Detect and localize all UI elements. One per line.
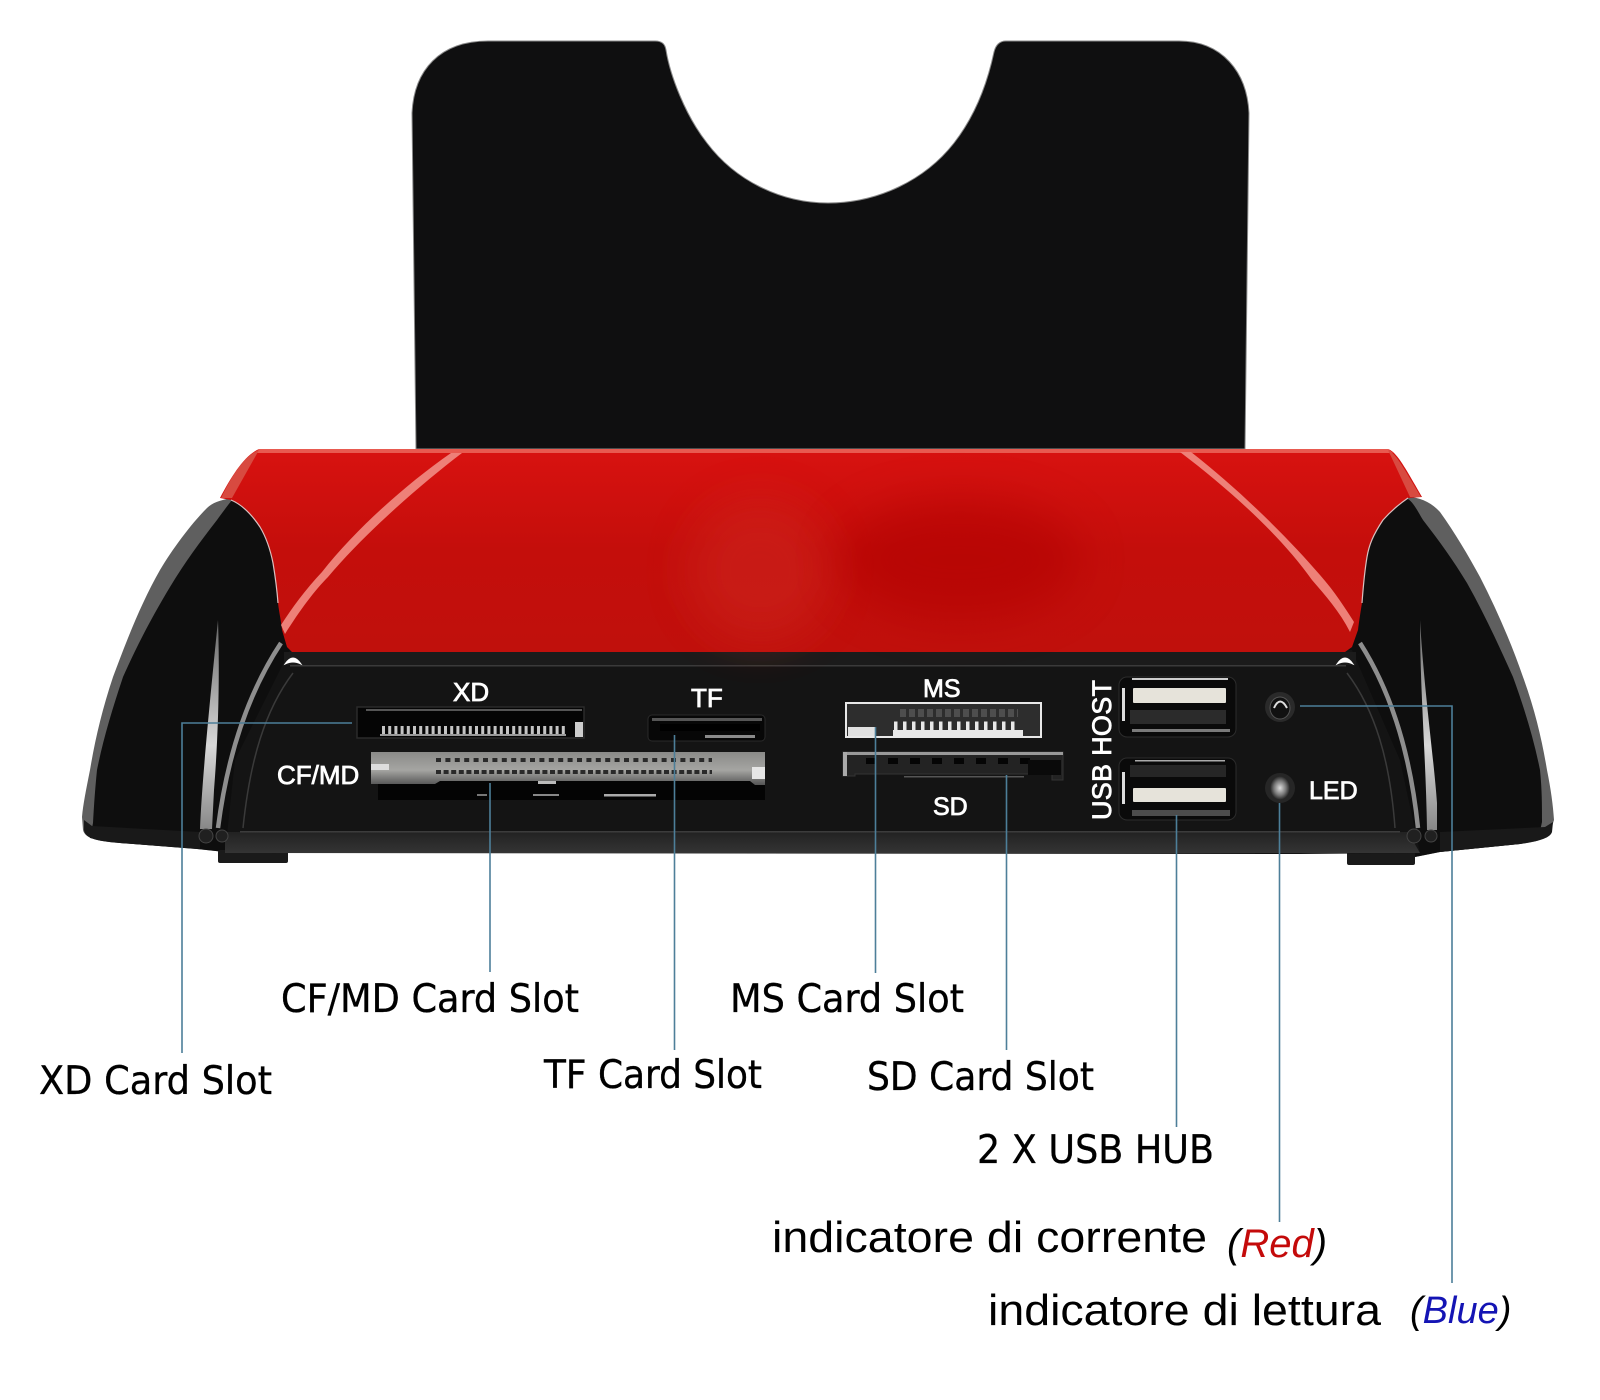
leader: XD (182, 723, 352, 1053)
leader: SD (1006, 775, 1008, 1050)
MS slot (846, 703, 1041, 737)
red top cover (220, 449, 1422, 652)
panel label: TF: TF (691, 683, 723, 713)
label: 2 X USB HUB: 2 X USB HUB (977, 1128, 1214, 1173)
CF/MD slot (371, 752, 765, 800)
right wing (1340, 497, 1554, 857)
USB port top (1119, 677, 1236, 737)
docking base (82, 449, 1554, 865)
wing highlights (199, 620, 1437, 843)
leader lines (182, 706, 1452, 1283)
feet (218, 850, 1415, 865)
hard drive stand (412, 41, 1249, 449)
SD slot (843, 752, 1063, 780)
panel label: XD: XD (453, 677, 489, 707)
panel label: USB HOST: USB HOST (1087, 680, 1117, 820)
panel label: LED: LED (1309, 777, 1358, 805)
label: CF/MD Card Slot: CF/MD Card Slot (281, 977, 579, 1022)
XD slot (357, 707, 584, 738)
panel label: SD: SD (933, 793, 968, 821)
leader: USB (1176, 815, 1178, 1127)
label: MS Card Slot: MS Card Slot (730, 977, 964, 1022)
leader: read LED (1300, 706, 1452, 1283)
label: SD Card Slot: SD Card Slot (867, 1055, 1094, 1100)
label: TF Card Slot: TF Card Slot (543, 1053, 762, 1098)
leader: MS (874, 727, 876, 973)
LED power indicator (1265, 773, 1295, 803)
leader: CF/MD (489, 783, 491, 972)
label: Blue: (Blue) (1410, 1290, 1511, 1332)
label: XD Card Slot: XD Card Slot (39, 1059, 272, 1104)
front panel (225, 650, 1420, 854)
leader: TF (674, 735, 676, 1050)
TF slot (648, 715, 765, 741)
panel label: MS: MS (923, 675, 960, 703)
LED read indicator (1265, 692, 1295, 722)
left wing (82, 498, 300, 852)
label: Red: (Red) (1227, 1222, 1327, 1266)
USB port bottom (1119, 758, 1236, 820)
label: indicatore di corrente: indicatore di corrente (772, 1213, 1207, 1262)
panel label: CF/MD: CF/MD (277, 760, 359, 790)
label: indicatore di lettura: indicatore di lettura (988, 1286, 1382, 1335)
leader: power LED (1278, 803, 1280, 1222)
